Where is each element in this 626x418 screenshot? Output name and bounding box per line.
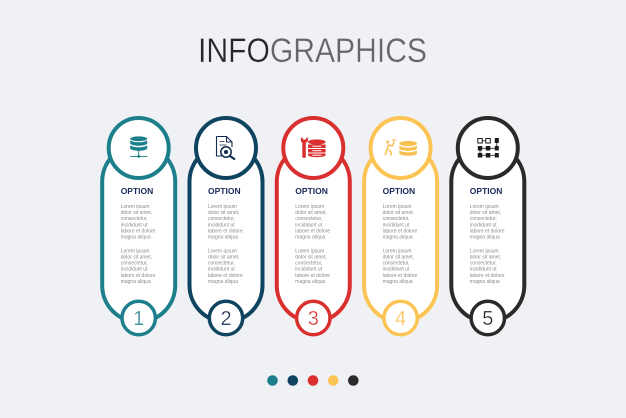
top circle 2 xyxy=(196,118,256,178)
text block 5a xyxy=(470,204,505,240)
text block 1b: Lorem ipsum xyxy=(121,248,150,254)
text block 3b: incididunt ut xyxy=(295,267,323,273)
text block 4b: incididunt ut xyxy=(383,267,410,273)
heading 1: OPTION xyxy=(121,186,153,196)
text block 2a: magna aliqua xyxy=(208,234,238,240)
text block 1a: incididunt ut xyxy=(121,222,148,228)
text block 4a: incididunt ut xyxy=(383,222,410,228)
text block 2a: labore et dolore xyxy=(208,228,243,234)
text block 4b: dolor sit amet, xyxy=(383,254,414,260)
heading 3: OPTION xyxy=(295,186,328,196)
icon: miner and database xyxy=(385,140,417,156)
text block 1b: magna aliqua xyxy=(121,279,151,285)
text block 2a: Lorem ipsum xyxy=(208,204,237,210)
text block 2a xyxy=(208,204,243,240)
text block 3b xyxy=(295,248,330,285)
text block 3a: dolor sit amet, xyxy=(295,210,327,216)
heading 2: OPTION xyxy=(208,186,241,196)
text block 5b: dolor sit amet, xyxy=(470,254,501,260)
text block 2b: magna aliqua xyxy=(208,279,238,285)
number 3: 3 xyxy=(308,308,319,330)
panel: option 4 xyxy=(364,118,437,335)
text block 1b: labore et dolore xyxy=(121,273,156,279)
text block 3b: consectetur, xyxy=(295,261,322,267)
bottom circle 4 xyxy=(384,301,417,335)
text block 1a: labore et dolore xyxy=(121,228,156,234)
bottom circle 3 xyxy=(297,301,330,335)
text block 2b: Lorem ipsum xyxy=(208,248,237,254)
text block 2b: consectetur, xyxy=(208,261,235,267)
text block 5a: Lorem ipsum xyxy=(470,204,499,210)
capsule outline 3 xyxy=(277,145,350,322)
text block 3a: consectetur, xyxy=(295,216,322,222)
text block 1b: consectetur, xyxy=(121,261,148,267)
number 1: 1 xyxy=(133,308,144,330)
capsule outline 2 xyxy=(190,145,262,322)
panel: option 3 xyxy=(277,118,350,335)
text block 4a: consectetur, xyxy=(383,216,410,222)
text block 4b xyxy=(383,248,418,285)
legend dots xyxy=(267,375,359,386)
text block 4b: Lorem ipsum xyxy=(383,248,412,254)
text block 5a: incididunt ut xyxy=(470,222,497,228)
top circle 5 xyxy=(458,118,518,178)
icon: document search xyxy=(216,136,235,160)
title: INFOGRAPHICS xyxy=(198,32,427,70)
bottom circle 5 xyxy=(471,301,504,335)
text block 4a xyxy=(383,204,418,240)
icon detail: database lights xyxy=(312,146,321,156)
panel: option 1 xyxy=(102,118,175,335)
text block 3a: labore et dolore xyxy=(295,228,330,234)
text block 2b: dolor sit amet, xyxy=(208,254,239,260)
text block 1b xyxy=(121,248,156,285)
icon: wrench and database xyxy=(301,137,326,158)
text block 2a: dolor sit amet, xyxy=(208,210,239,216)
capsule outline 5 xyxy=(451,145,524,322)
icon: flow diagram xyxy=(477,138,499,158)
panel: option 2 xyxy=(190,118,262,335)
bottom circle 1 xyxy=(122,301,155,335)
text block 1a xyxy=(121,204,156,240)
number 5: 5 xyxy=(482,308,493,330)
capsule outline 1 xyxy=(102,145,175,322)
text block 2a: consectetur, xyxy=(208,216,235,222)
text block 1a: consectetur, xyxy=(121,216,148,222)
heading 5: OPTION xyxy=(470,186,502,196)
text block 3a xyxy=(295,204,330,240)
top circle 1 xyxy=(109,118,169,178)
text block 2b: labore et dolore xyxy=(208,273,243,279)
text block 1a: dolor sit amet, xyxy=(121,210,152,216)
bottom circle 2 xyxy=(209,301,243,335)
text block 2b: incididunt ut xyxy=(208,267,235,273)
text block 3a: magna aliqua xyxy=(295,234,326,240)
text block 1a: magna aliqua xyxy=(121,234,151,240)
top circle 3 xyxy=(283,118,343,178)
text block 5a: consectetur, xyxy=(470,216,497,222)
text block 5b: consectetur, xyxy=(470,261,497,267)
top circle 4 xyxy=(371,118,431,178)
text block 5b: labore et dolore xyxy=(470,273,505,279)
heading 4: OPTION xyxy=(383,186,415,196)
text block 5b: Lorem ipsum xyxy=(470,248,499,254)
text block 3b: Lorem ipsum xyxy=(295,248,324,254)
text block 5a: magna aliqua xyxy=(470,234,500,240)
text block 2a: incididunt ut xyxy=(208,222,235,228)
number 2: 2 xyxy=(220,308,232,330)
text block 5a: dolor sit amet, xyxy=(470,210,501,216)
text block 1b: dolor sit amet, xyxy=(121,254,152,260)
text block 4b: labore et dolore xyxy=(383,273,418,279)
text block 3a: Lorem ipsum xyxy=(295,204,324,210)
text block 3b: dolor sit amet, xyxy=(295,254,327,260)
text block 4b: magna aliqua xyxy=(383,279,413,285)
text block 3a: incididunt ut xyxy=(295,222,323,228)
number 4: 4 xyxy=(395,308,406,330)
text block 4a: magna aliqua xyxy=(383,234,413,240)
text block 3b: labore et dolore xyxy=(295,273,330,279)
text block 5b xyxy=(470,248,505,285)
text block 2b xyxy=(208,248,243,285)
text block 5b: incididunt ut xyxy=(470,267,497,273)
text block 3b: magna aliqua xyxy=(295,279,326,285)
text block 4b: consectetur, xyxy=(383,261,410,267)
text block 4a: labore et dolore xyxy=(383,228,418,234)
text block 1a: Lorem ipsum xyxy=(121,204,150,210)
text block 4a: Lorem ipsum xyxy=(383,204,412,210)
text block 4a: dolor sit amet, xyxy=(383,210,414,216)
capsule outline 4 xyxy=(364,145,437,322)
text block 5b: magna aliqua xyxy=(470,279,500,285)
text block 5a: labore et dolore xyxy=(470,228,505,234)
panel: option 5 xyxy=(451,118,524,335)
icon: database network xyxy=(130,136,147,158)
text block 1b: incididunt ut xyxy=(121,267,148,273)
